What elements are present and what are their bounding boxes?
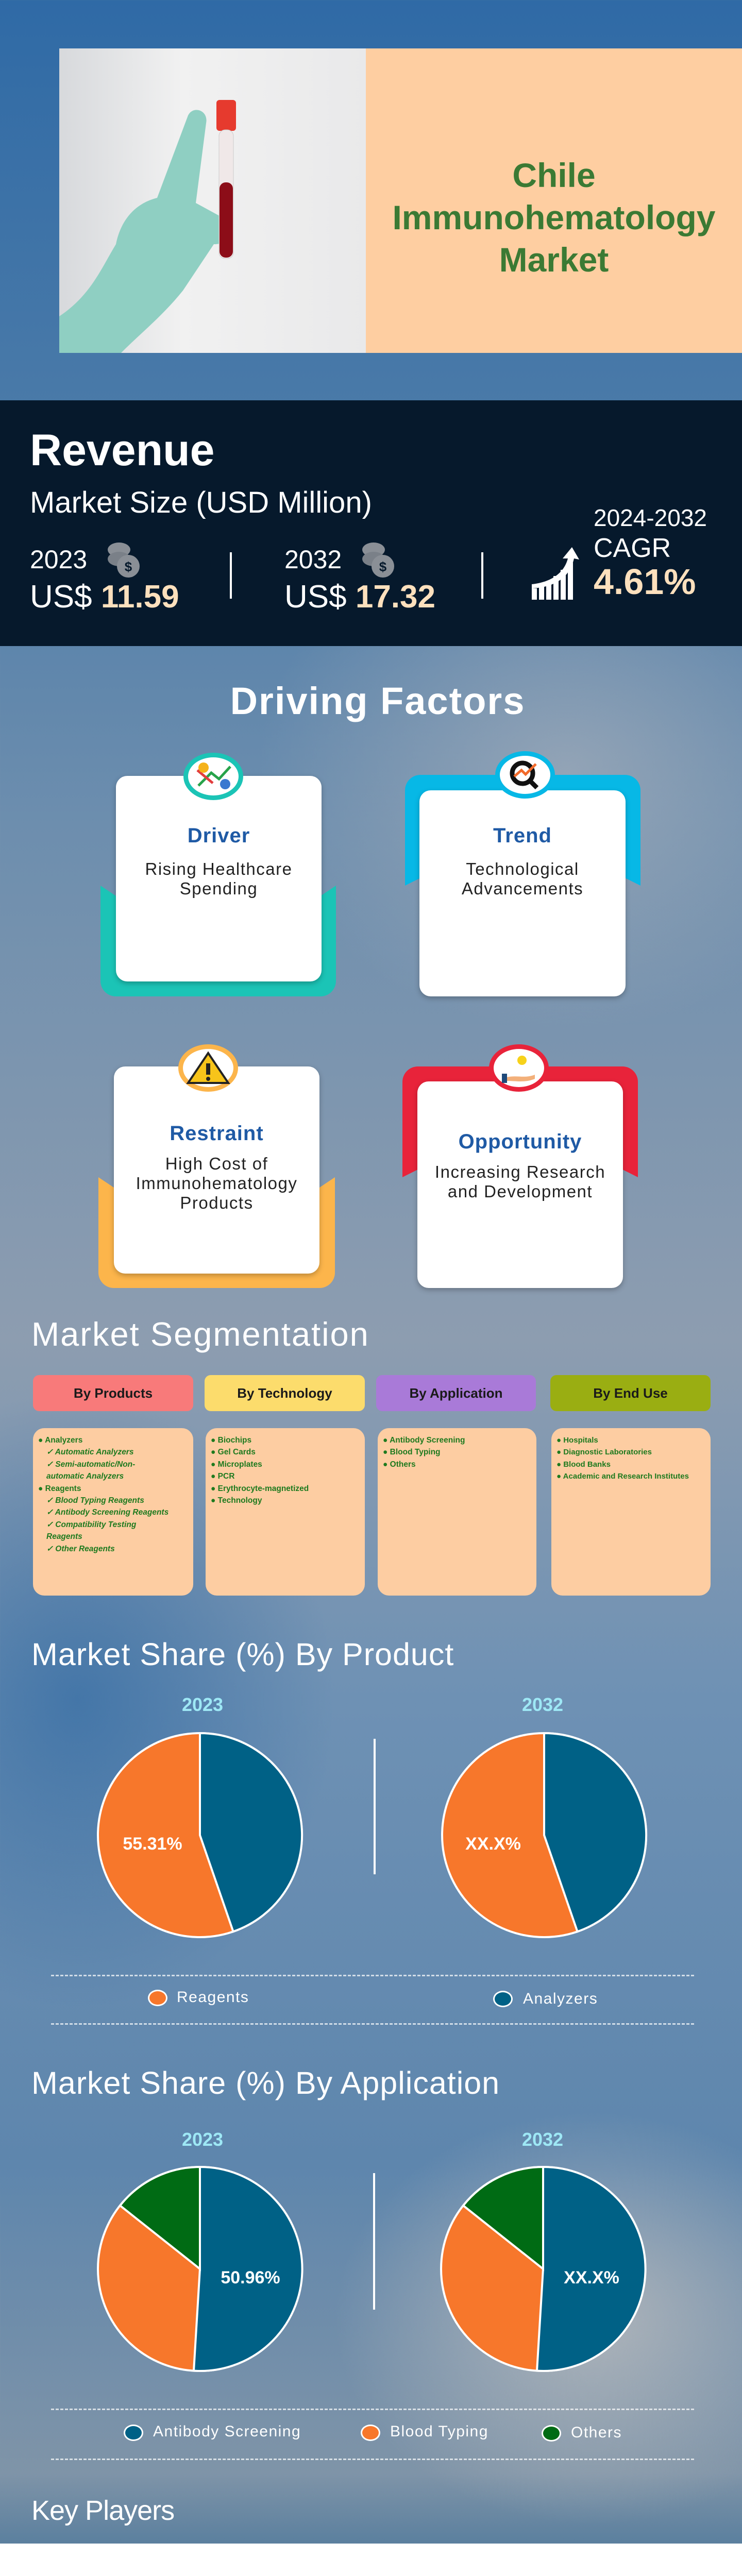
market size label: Market Size (USD Million) bbox=[30, 486, 372, 519]
card: Restraint: Restraint bbox=[170, 1122, 264, 1145]
segment: By Technology: ● Technology bbox=[211, 1496, 262, 1505]
legend: application: Blood Typing bbox=[390, 2423, 488, 2440]
card: Driver: Rising Healthcare bbox=[145, 859, 292, 878]
CAGR: 2024-2032 bbox=[594, 504, 707, 531]
segment: By Application: By Application bbox=[409, 1385, 503, 1401]
segment: By Products: ✓ Other Reagents bbox=[46, 1545, 115, 1553]
card: Restraint: High Cost of bbox=[165, 1154, 268, 1173]
segment: By Products: ✓ Compatibility Testing bbox=[46, 1520, 136, 1529]
pie chart: application 2023 bbox=[97, 2166, 303, 2372]
icon: coins: $ bbox=[379, 559, 387, 574]
segment: By Application: ● Antibody Screening bbox=[383, 1436, 465, 1445]
text: 2032 bbox=[522, 2129, 563, 2150]
card: Restraint: Products bbox=[180, 1193, 254, 1212]
pie chart: application 2032 bbox=[440, 2166, 647, 2372]
CAGR bbox=[594, 504, 707, 602]
revenue band bbox=[0, 400, 742, 646]
2032 value bbox=[284, 543, 435, 615]
segment: By End Use: By End Use bbox=[593, 1385, 668, 1401]
segment: By Products: By Products bbox=[74, 1385, 153, 1401]
legend: application: Antibody Screening bbox=[153, 2423, 301, 2440]
2023 value bbox=[30, 543, 179, 615]
heading: Key Players: Key Players bbox=[31, 2495, 174, 2526]
title panel: Immunohematology bbox=[392, 198, 716, 236]
segment: By End Use bbox=[550, 1375, 711, 1596]
text: 2023 bbox=[182, 1694, 223, 1715]
icon: driver gears bbox=[183, 753, 243, 800]
pie chart: product 2023: 55.31% bbox=[123, 1834, 182, 1854]
segment: By Products bbox=[33, 1375, 193, 1596]
heading: Market Share By Application: Market Share (%) By Application bbox=[31, 2065, 500, 2100]
card: Opportunity: and Development bbox=[448, 1182, 593, 1201]
CAGR: 4.61% bbox=[594, 562, 696, 602]
pie chart: product 2032 bbox=[441, 1732, 647, 1938]
icon: magnifier trend bbox=[495, 751, 555, 799]
legend: product bbox=[148, 1989, 598, 2007]
card: Driver: Driver bbox=[188, 824, 250, 847]
legend: application bbox=[124, 2423, 622, 2442]
title panel: Market bbox=[499, 241, 609, 279]
segment: By Products: ✓ Semi-automatic/Non- bbox=[46, 1460, 135, 1469]
2023 value: 2023 bbox=[30, 545, 87, 574]
segment: By End Use: ● Diagnostic Laboratories bbox=[556, 1448, 652, 1456]
segment: By Technology: ● Erythrocyte-magnetized bbox=[211, 1484, 309, 1493]
card: Trend: Technological bbox=[466, 859, 579, 878]
card: Trend bbox=[405, 751, 640, 1001]
card: Trend: Trend bbox=[493, 824, 552, 847]
heading: Driving Factors: Driving Factors bbox=[230, 680, 525, 722]
legend: application: Others bbox=[571, 2424, 622, 2441]
segment: By Application bbox=[376, 1375, 536, 1596]
segment: By End Use: ● Blood Banks bbox=[556, 1460, 611, 1469]
pie chart: product 2032: XX.X% bbox=[465, 1834, 521, 1854]
2032 value: US$ 17.32 bbox=[284, 579, 435, 615]
card: Opportunity bbox=[402, 1044, 638, 1292]
segment: By Technology bbox=[205, 1375, 365, 1596]
segment: By End Use: ● Hospitals bbox=[556, 1436, 598, 1445]
segment: By Technology: ● Gel Cards bbox=[211, 1448, 256, 1456]
icon: coins bbox=[362, 543, 394, 578]
legend: product: Analyzers bbox=[523, 1990, 598, 2007]
segment: By Technology: ● Microplates bbox=[211, 1460, 262, 1469]
pie chart: application 2032: XX.X% bbox=[564, 2268, 619, 2287]
card: Restraint bbox=[98, 1044, 335, 1288]
icon: coins: $ bbox=[125, 559, 132, 574]
segment: By Products: ✓ Antibody Screening Reagents bbox=[46, 1508, 168, 1517]
key players panel bbox=[0, 2544, 742, 2576]
segment: By Products: ✓ Automatic Analyzers bbox=[46, 1448, 133, 1456]
text: 2023 bbox=[182, 2129, 223, 2150]
segment: By Application: ● Others bbox=[383, 1460, 416, 1469]
segment: By Products: ● Analyzers ● Reagents bbox=[38, 1436, 82, 1493]
legend: product: Reagents bbox=[177, 1989, 249, 2006]
icon: idea hand bbox=[489, 1044, 549, 1092]
card: Driver bbox=[100, 753, 336, 996]
segment: By Technology: ● PCR bbox=[211, 1472, 234, 1481]
segment: By Products: ✓ Blood Typing Reagents bbox=[46, 1496, 144, 1505]
segment: By Products: Reagents bbox=[46, 1532, 82, 1541]
2032 value: 2032 bbox=[284, 545, 342, 574]
card: Restraint: Immunohematology bbox=[136, 1174, 297, 1193]
title panel: Chile bbox=[512, 156, 596, 194]
pie chart: product 2023 bbox=[97, 1732, 303, 1938]
segment: By End Use: ● Academic and Research Institutes bbox=[556, 1472, 689, 1481]
icon: coins bbox=[108, 543, 140, 578]
card: Trend: Advancements bbox=[462, 879, 583, 898]
title panel bbox=[366, 48, 742, 353]
segment: By Application: ● Blood Typing bbox=[383, 1448, 441, 1456]
icon: warning bbox=[178, 1044, 238, 1092]
hero image: gloved hand with blood tube bbox=[59, 48, 366, 353]
heading: Market Segmentation: Market Segmentation bbox=[31, 1315, 369, 1353]
segment: By Technology: ● Biochips bbox=[211, 1436, 251, 1445]
icon: growth chart bbox=[532, 547, 579, 600]
segment: By Technology: By Technology bbox=[237, 1385, 332, 1401]
card: Opportunity: Opportunity bbox=[459, 1130, 582, 1153]
heading: Market Share By Product: Market Share (%) By Product bbox=[31, 1637, 454, 1672]
text: 2032 bbox=[522, 1694, 563, 1715]
2023 value: US$ 11.59 bbox=[30, 579, 179, 615]
segment: By Products: automatic Analyzers bbox=[46, 1472, 124, 1481]
CAGR: CAGR bbox=[594, 533, 671, 563]
card: Driver: Spending bbox=[180, 879, 258, 898]
card: Opportunity: Increasing Research bbox=[435, 1162, 605, 1181]
revenue heading: Revenue bbox=[30, 426, 214, 475]
pie chart: application 2023: 50.96% bbox=[221, 2268, 280, 2287]
